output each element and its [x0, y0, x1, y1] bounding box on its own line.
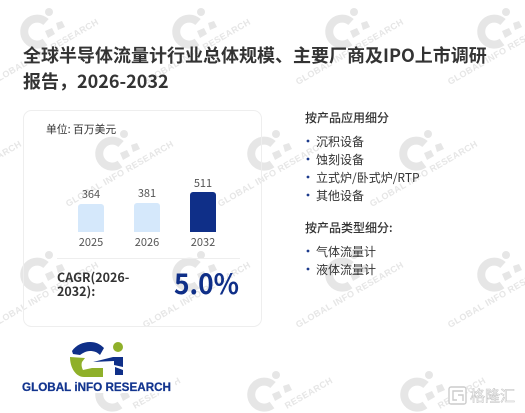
- watermark pattern: GLOBAL INFO RESEARCH: [141, 17, 252, 87]
- panel: application segments: 其他设备: [316, 187, 364, 204]
- panel: application segments: 按产品应用细分: [305, 109, 389, 126]
- source mark: Gelonghui: 格隆汇: [470, 385, 515, 406]
- watermark pattern: GLOBAL INFO RESEARCH: [64, 139, 175, 209]
- panel: product type segments: 按产品类型细分:: [305, 219, 393, 236]
- title: [23, 42, 487, 94]
- panel: application segments: 沉积设备: [316, 133, 364, 150]
- bar chart: [78, 175, 216, 250]
- bar chart: 511: [194, 175, 212, 191]
- watermark pattern: RESEARCH: [436, 375, 488, 411]
- logo: Global Info Research: [20, 338, 175, 394]
- source mark: Gelonghui: [449, 385, 515, 406]
- CAGR value: 5.0%: [174, 263, 239, 303]
- watermark pattern: GLOBAL INFO RESEARCH: [294, 260, 405, 330]
- bar chart: 2032: [191, 234, 215, 250]
- bar chart: 2026: [135, 234, 159, 250]
- CAGR label: 2032):: [57, 281, 95, 300]
- unit label: 单位: 百万美元: [46, 121, 116, 137]
- panel: market size card: [24, 110, 262, 326]
- watermark pattern: GLOBAL INFO RESEARCH: [141, 260, 252, 330]
- watermark pattern: RESEARCH: [283, 375, 335, 411]
- logo: Global Info Research: GLOBAL iNFO RESEARCH: [22, 380, 171, 394]
- bar chart: 364: [82, 186, 100, 202]
- watermark pattern: RESEARCH: [131, 375, 183, 411]
- panel: product type segments: 液体流量计: [316, 261, 376, 278]
- panel: product type segments: 气体流量计: [316, 243, 376, 260]
- CAGR label: CAGR(2026-: [57, 267, 130, 286]
- bar chart: 2025: [79, 234, 103, 250]
- CAGR label: [57, 267, 130, 300]
- panel: application segments: 立式炉/卧式炉/RTP: [316, 169, 420, 186]
- watermark pattern: GLOBAL INFO RESEARCH: [294, 17, 405, 87]
- panel: application segments: [305, 109, 420, 204]
- title: 全球半导体流量计行业总体规模、主要厂商及IPO上市调研: [23, 42, 487, 68]
- title: 报告，2026-2032: [23, 68, 169, 94]
- bar chart: 381: [138, 185, 156, 201]
- panel: application segments: 蚀刻设备: [316, 151, 364, 168]
- panel: product type segments: [305, 219, 393, 278]
- watermark pattern: GLOBAL INFO RESEARCH: [216, 139, 327, 209]
- watermark pattern: GLOBAL INFO RESEARCH: [368, 139, 479, 209]
